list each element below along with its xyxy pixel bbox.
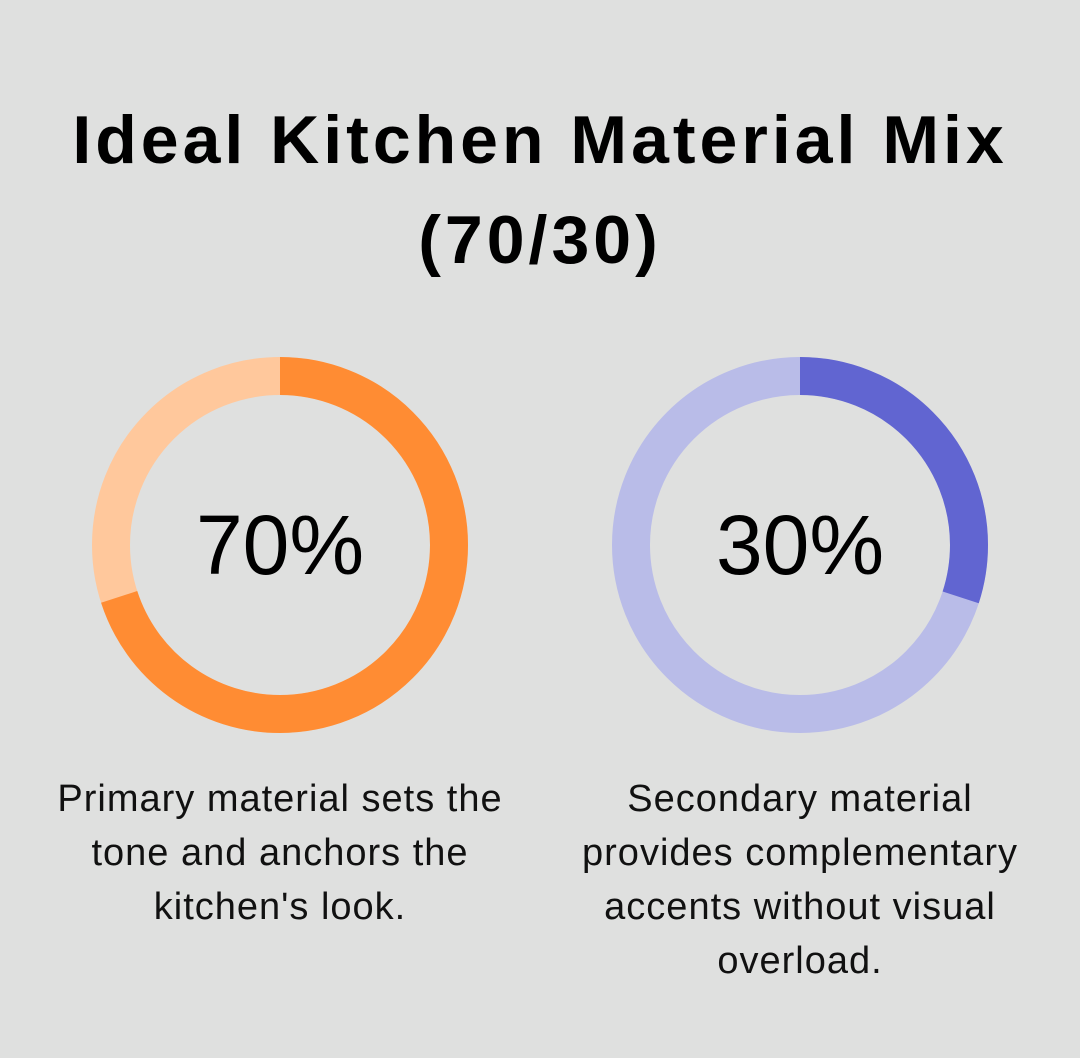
title: (70/30) <box>418 202 662 278</box>
description: secondary: overload. <box>717 940 883 982</box>
percent label 30%: 30% <box>716 498 884 592</box>
description: secondary: accents without visual <box>604 886 996 928</box>
description: primary <box>57 778 503 928</box>
description: primary: kitchen's look. <box>154 886 406 928</box>
description: secondary: Secondary material <box>627 778 973 820</box>
donut: secondary 30% <box>612 357 988 733</box>
percent label 70%: 70% <box>196 498 364 592</box>
description: primary: Primary material sets the <box>57 778 503 820</box>
description: secondary <box>582 778 1018 982</box>
title <box>72 102 1008 278</box>
description: secondary: provides complementary <box>582 832 1018 874</box>
donut: primary 70% <box>92 357 468 733</box>
description: primary: tone and anchors the <box>91 832 469 874</box>
title: Ideal Kitchen Material Mix <box>72 102 1008 178</box>
